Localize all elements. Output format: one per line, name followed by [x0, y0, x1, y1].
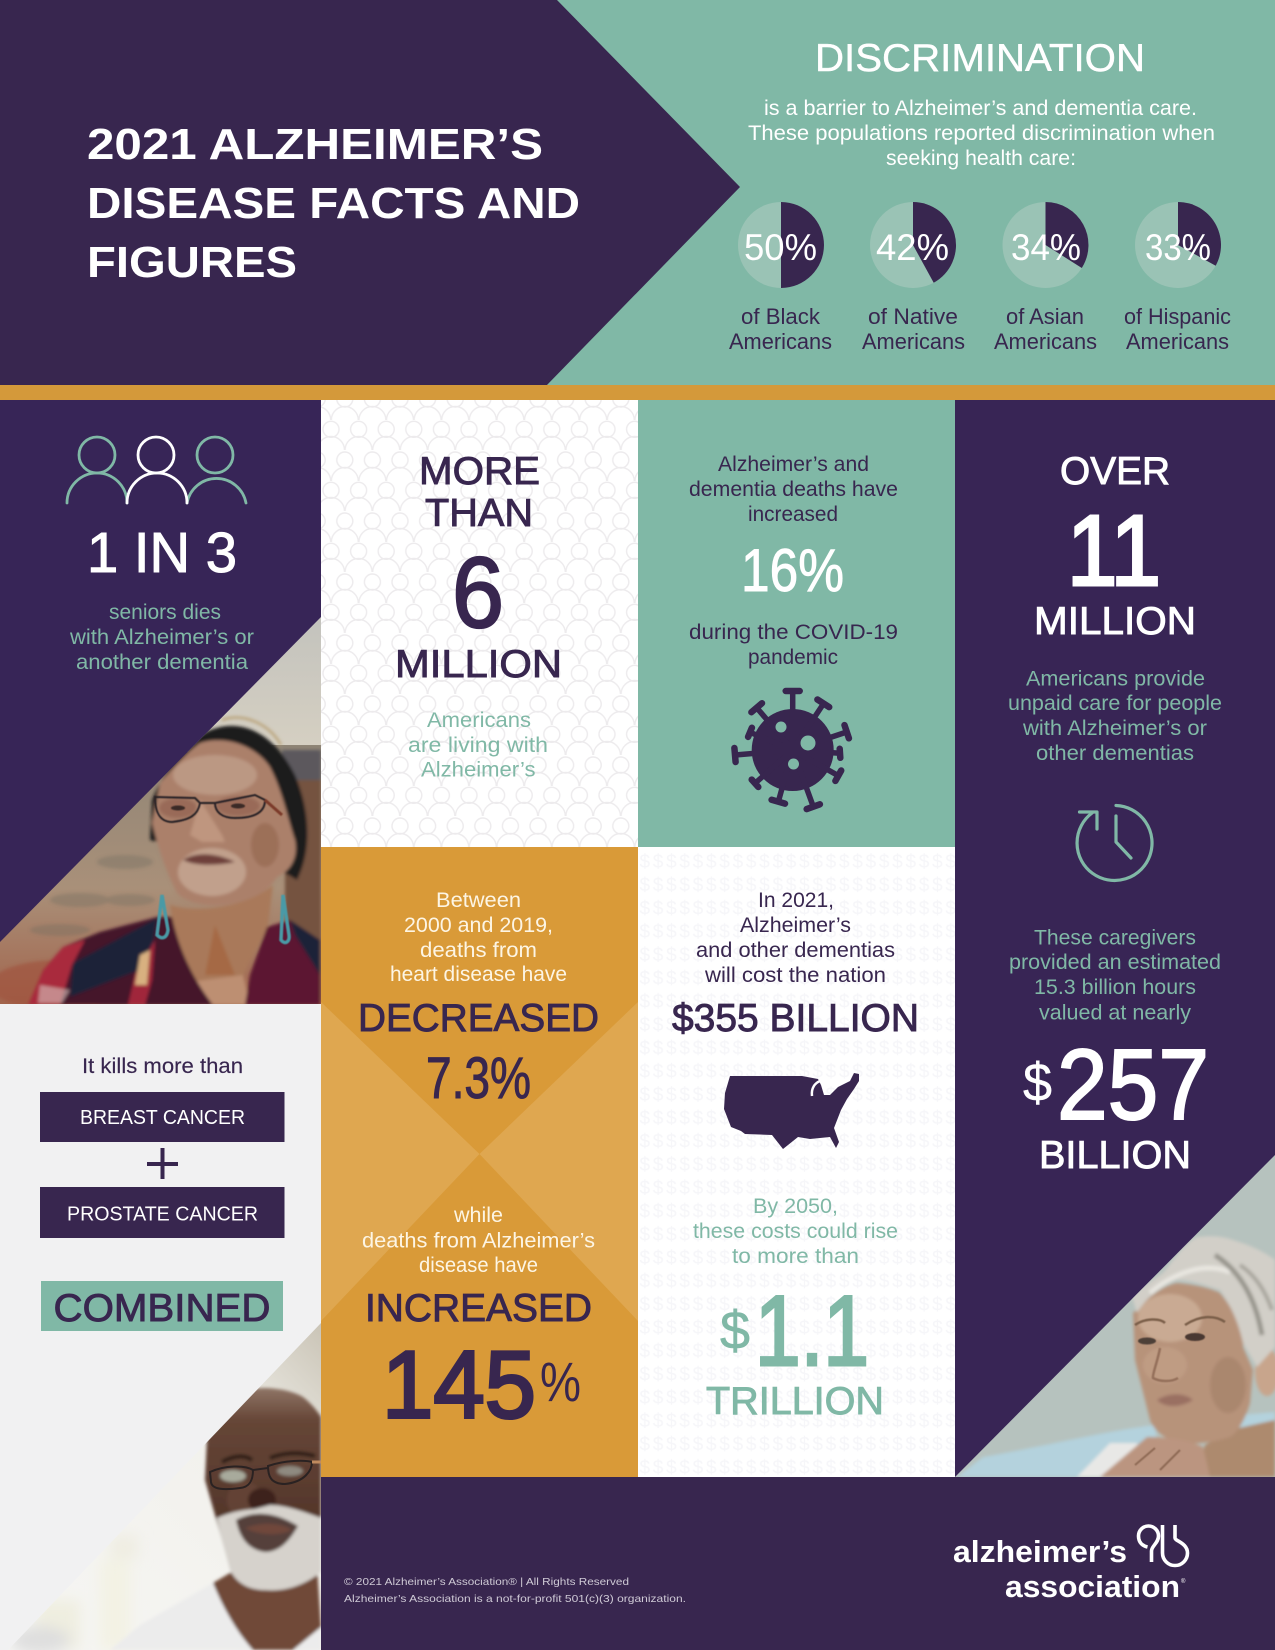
cost intro text	[696, 888, 895, 987]
logo: Alzheimer's Association: alzheimer’s	[953, 1534, 1127, 1569]
cost intro text: will cost the nation	[704, 963, 886, 987]
panel: covid deaths	[638, 400, 955, 847]
icon: plus	[147, 1148, 178, 1179]
copyright text: © 2021 Alzheimer’s Association® | All Rights Reserved	[344, 1576, 629, 1588]
title	[87, 120, 580, 287]
covid intro text: increased	[748, 502, 838, 526]
caregivers description: unpaid care for people	[1008, 691, 1222, 715]
copyright text	[344, 1576, 686, 1605]
americans description: are living with	[408, 733, 548, 757]
title: FIGURES	[87, 238, 297, 287]
hours description: 15.3 billion hours	[1034, 975, 1196, 999]
increased 145% statistic	[365, 1287, 592, 1438]
heart disease text: 2000 and 2019,	[404, 913, 553, 937]
panel: heart disease versus alzheimer's deaths	[321, 847, 638, 1477]
alzheimer's deaths text	[362, 1203, 595, 1277]
discrimination intro text: is a barrier to Alzheimer’s and dementia care.	[764, 96, 1197, 120]
1 in 3 statistic: 1 IN 3	[87, 521, 237, 585]
$1.1 trillion statistic: 1.1	[755, 1275, 869, 1386]
americans description: Alzheimer’s	[421, 758, 536, 782]
discrimination intro text: seeking health care:	[886, 146, 1076, 170]
pie chart: 42% of Native Americans: Americans	[862, 329, 965, 354]
label: combined: COMBINED	[54, 1287, 270, 1330]
6 million statistic: MILLION	[395, 643, 562, 686]
over 11 million statistic	[1034, 450, 1196, 643]
$355 billion statistic: $355 BILLION	[672, 997, 919, 1040]
icon: clock with arrow	[1077, 806, 1152, 880]
$1.1 trillion statistic	[706, 1275, 884, 1423]
panel: footer	[321, 1477, 1275, 1650]
covid intro text: dementia deaths have	[689, 477, 898, 501]
title: 2021 ALZHEIMER’S	[87, 120, 543, 169]
caregivers description: other dementias	[1036, 741, 1194, 765]
label: prostate cancer: PROSTATE CANCER	[67, 1204, 258, 1226]
cost intro text: and other dementias	[696, 938, 895, 962]
hours description: provided an estimated	[1009, 950, 1221, 974]
heart disease text: Between	[436, 888, 521, 912]
caregivers description	[1008, 666, 1222, 765]
panel: discrimination	[546, 0, 1275, 386]
increased 145% statistic: 145	[382, 1332, 536, 1438]
more than heading: THAN	[425, 492, 533, 535]
decreased 7.3% statistic	[358, 997, 599, 1111]
covid closing text: pandemic	[748, 645, 838, 669]
future cost text	[693, 1194, 898, 1268]
it kills more than text: It kills more than	[82, 1054, 243, 1078]
pie chart: 34% of Asian Americans: 34%	[1011, 227, 1081, 268]
seniors description: seniors dies	[109, 600, 221, 624]
pie chart: 50% of Black Americans: of Black	[741, 304, 821, 329]
panel: 1 in 3 seniors	[0, 400, 321, 1010]
decreased 7.3% statistic: 7.3%	[426, 1046, 531, 1111]
decreased 7.3% statistic: DECREASED	[358, 997, 599, 1040]
more than heading: MORE	[419, 450, 540, 493]
hours description: valued at nearly	[1039, 1000, 1191, 1024]
header panel: title side	[0, 0, 1275, 386]
pie chart: 34% of Asian Americans: of Asian	[1006, 304, 1084, 329]
seniors description: another dementia	[76, 650, 248, 674]
covid closing text	[689, 620, 898, 669]
discrimination intro text	[748, 96, 1215, 170]
panel: cost to the nation	[638, 847, 955, 1477]
caregivers description: with Alzheimer’s or	[1022, 716, 1207, 740]
16% statistic: 16%	[741, 537, 844, 604]
future cost text: By 2050,	[753, 1194, 838, 1218]
alzheimer's deaths text: disease have	[419, 1253, 538, 1277]
$257 billion statistic: 257	[1057, 1029, 1209, 1141]
copyright text: Alzheimer’s Association is a not-for-profit 501(c)(3) organization.	[344, 1593, 686, 1605]
covid closing text: during the COVID-19	[689, 620, 898, 644]
over 11 million statistic: OVER	[1060, 450, 1170, 493]
$257 billion statistic	[1023, 1029, 1209, 1177]
label: breast cancer: BREAST CANCER	[80, 1107, 245, 1129]
pie chart: 50% of Black Americans: Americans	[729, 329, 832, 354]
americans description	[408, 708, 548, 782]
americans description: Americans	[427, 708, 531, 732]
icon: coronavirus	[734, 691, 849, 809]
logo: Alzheimer's Association: ®	[1181, 1578, 1186, 1585]
increased 145% statistic: %	[540, 1350, 581, 1413]
cost intro text: Alzheimer’s	[740, 913, 851, 937]
pie chart: 42% of Native Americans	[862, 202, 965, 354]
label: prostate cancer	[40, 1187, 284, 1238]
pie chart: 33% of Hispanic Americans: 33%	[1145, 227, 1211, 268]
seniors description: with Alzheimer’s or	[69, 625, 254, 649]
panel: more than 6 million	[321, 400, 638, 847]
title: DISEASE FACTS AND	[87, 179, 580, 228]
$1.1 trillion statistic: TRILLION	[706, 1380, 884, 1423]
pie chart: 34% of Asian Americans	[994, 202, 1097, 354]
discrimination intro text: These populations reported discrimination when	[748, 121, 1215, 145]
6 million statistic	[395, 537, 562, 686]
over 11 million statistic: MILLION	[1034, 600, 1196, 643]
hours description: These caregivers	[1034, 926, 1196, 950]
pie chart: 42% of Native Americans: 42%	[876, 227, 949, 268]
pie chart: 33% of Hispanic Americans: of Hispanic	[1124, 304, 1231, 329]
heart disease text: heart disease have	[390, 962, 567, 986]
pie chart: 33% of Hispanic Americans	[1124, 202, 1231, 354]
photo: older woman with glasses	[0, 610, 321, 1010]
covid intro text	[689, 452, 898, 526]
over 11 million statistic: 11	[1067, 495, 1161, 607]
icon: map of the United States	[724, 1073, 859, 1149]
icon: three people	[67, 437, 246, 503]
seniors description	[69, 600, 254, 674]
cost intro text: In 2021,	[758, 888, 834, 912]
$257 billion statistic: $	[1023, 1053, 1052, 1113]
future cost text: these costs could rise	[693, 1219, 898, 1243]
covid intro text: Alzheimer’s and	[718, 452, 869, 476]
more than heading	[419, 450, 540, 535]
label: breast cancer	[40, 1092, 284, 1142]
logo: Alzheimer's Association	[953, 1525, 1188, 1604]
pie chart: 33% of Hispanic Americans: Americans	[1126, 329, 1229, 354]
logo: Alzheimer's Association: association	[1005, 1569, 1180, 1604]
caregivers description: Americans provide	[1026, 666, 1205, 690]
panel: more than cancers combined	[0, 1004, 321, 1650]
heart disease text	[390, 888, 567, 986]
panel: unpaid caregivers	[950, 400, 1275, 1480]
increased 145% statistic: INCREASED	[365, 1287, 592, 1330]
photo: older man with white beard	[0, 1320, 321, 1650]
$257 billion statistic: BILLION	[1039, 1134, 1191, 1177]
pie chart: 50% of Black Americans	[729, 202, 832, 354]
$1.1 trillion statistic: $	[720, 1301, 750, 1361]
pie chart: 50% of Black Americans: 50%	[744, 227, 817, 268]
pie chart: 42% of Native Americans: of Native	[868, 304, 958, 329]
heart disease text: deaths from	[420, 938, 537, 962]
discrimination heading: DISCRIMINATION	[815, 37, 1145, 80]
6 million statistic: 6	[452, 537, 504, 649]
hours description	[1009, 926, 1221, 1024]
alzheimer's deaths text: while	[453, 1203, 503, 1227]
photo: woman with short gray hair	[950, 1150, 1275, 1480]
pie chart: 34% of Asian Americans: Americans	[994, 329, 1097, 354]
alzheimer's deaths text: deaths from Alzheimer’s	[362, 1228, 595, 1252]
future cost text: to more than	[732, 1244, 859, 1268]
